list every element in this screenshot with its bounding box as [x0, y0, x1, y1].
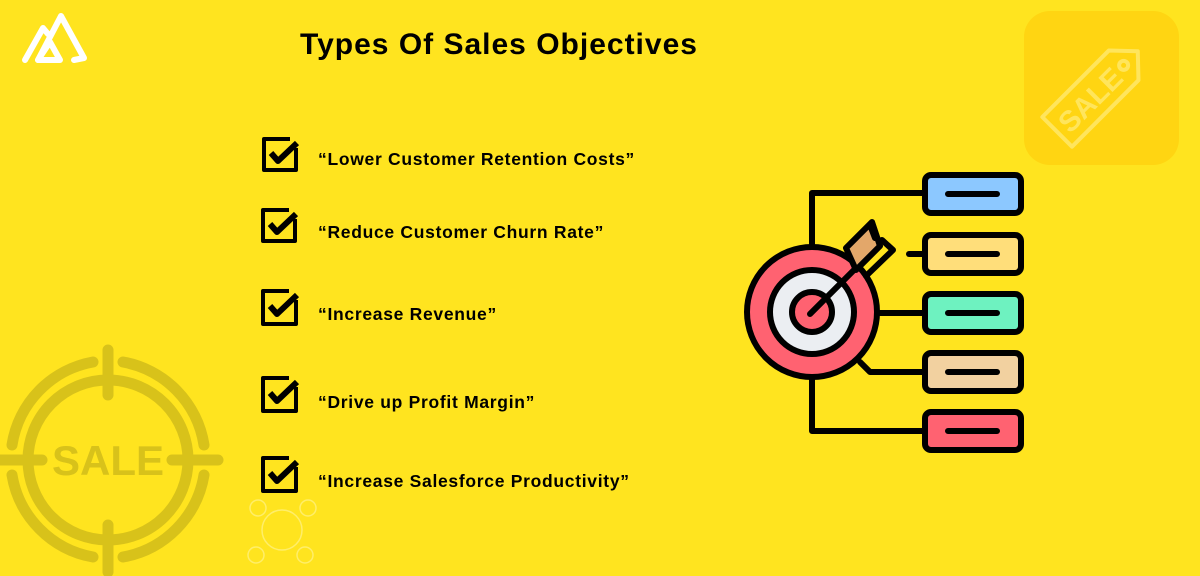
icons: checkboxes — [263, 139, 297, 491]
list item 2: “Reduce Customer Churn Rate” — [318, 222, 604, 242]
list item 1: “Lower Customer Retention Costs” — [318, 149, 635, 169]
icon: sale tag badge — [1024, 11, 1179, 165]
list item 5: “Increase Salesforce Productivity” — [318, 471, 630, 491]
list item 4: “Drive up Profit Margin” — [318, 392, 535, 412]
title: Types Of Sales Objectives — [300, 28, 698, 61]
diagram: target with connected boxes — [747, 175, 1021, 450]
icon: logo — [25, 16, 84, 60]
icon: sale target watermark: SALE — [52, 437, 164, 484]
icon: faint network watermark — [248, 500, 316, 563]
list item 3: “Increase Revenue” — [318, 304, 497, 324]
icon: sale tag badge: SALE — [1052, 62, 1130, 139]
icon: sale target watermark — [0, 350, 218, 572]
